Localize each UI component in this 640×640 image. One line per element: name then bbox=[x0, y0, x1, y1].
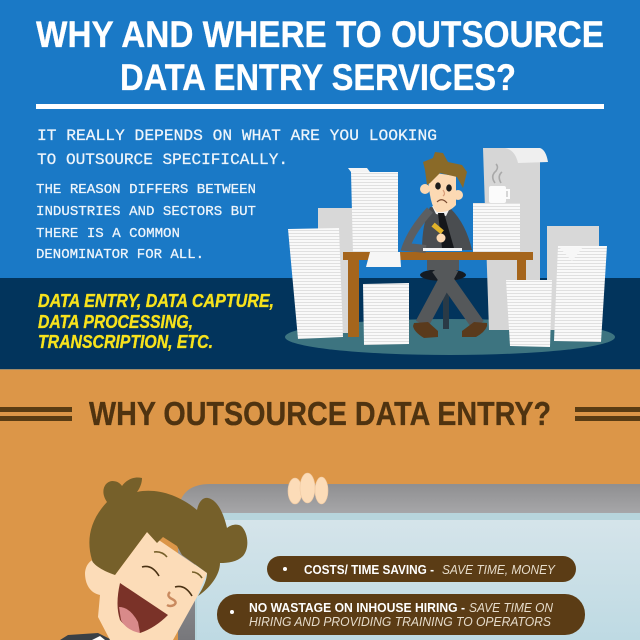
worker head bbox=[420, 152, 467, 212]
paper on desk bbox=[366, 248, 462, 267]
grey back stack left bbox=[318, 208, 355, 333]
title bbox=[36, 14, 604, 98]
callout text: SAVE TIME ON bbox=[469, 601, 554, 615]
tall paper scroll bbox=[483, 148, 548, 330]
text block: intro bbox=[37, 127, 437, 169]
title: DATA ENTRY SERVICES? bbox=[120, 57, 516, 98]
text block: yellow service list: DATA PROCESSING, bbox=[38, 312, 193, 332]
grey back stack right bbox=[547, 226, 599, 330]
paper stack under mug bbox=[473, 203, 520, 252]
desk bbox=[343, 252, 533, 337]
paper stack lower left bbox=[363, 283, 409, 345]
callout: no wastage on inhouse hiring bbox=[217, 594, 585, 635]
mouth bbox=[118, 583, 168, 633]
worker shoes bbox=[413, 322, 487, 338]
coffee mug bbox=[489, 164, 509, 203]
text block: reason: DENOMINATOR FOR ALL. bbox=[36, 247, 204, 263]
callout text: NO WASTAGE ON INHOUSE HIRING - bbox=[249, 601, 465, 615]
suit bbox=[60, 633, 112, 640]
nose bbox=[167, 592, 176, 606]
text block: reason: THE REASON DIFFERS BETWEEN bbox=[36, 182, 256, 198]
worker torso bbox=[406, 206, 472, 250]
callout: costs and time saving bbox=[267, 556, 576, 582]
paper stack right bbox=[554, 246, 607, 342]
callout text: SAVE TIME, MONEY bbox=[442, 563, 557, 577]
bullet bbox=[230, 610, 234, 614]
paper stack lower centre bbox=[506, 280, 552, 347]
text block: reason: INDUSTRIES AND SECTORS BUT bbox=[36, 204, 256, 220]
text block: reason: THERE IS A COMMON bbox=[36, 226, 180, 242]
text block: yellow service list: DATA ENTRY, DATA CAPTURE, bbox=[38, 291, 274, 311]
text block: intro: IT REALLY DEPENDS ON WHAT ARE YOU LOOKING bbox=[37, 127, 437, 145]
panel: orange section background bbox=[0, 369, 640, 640]
decorative heading bars left bbox=[0, 407, 72, 421]
text block: reason bbox=[36, 182, 256, 263]
text block: yellow service list bbox=[38, 291, 274, 352]
callout text bbox=[249, 601, 554, 629]
worker legs bbox=[422, 260, 478, 325]
illustration: laughing man bbox=[60, 477, 247, 640]
floor shadow bbox=[285, 319, 615, 355]
section heading: WHY OUTSOURCE DATA ENTRY? bbox=[89, 395, 551, 432]
icon: hand gripping monitor bbox=[288, 473, 328, 504]
decorative heading bars right bbox=[575, 407, 640, 421]
text block: yellow service list: TRANSCRIPTION, ETC. bbox=[38, 332, 213, 352]
title underline bbox=[36, 104, 604, 109]
tall paper stack left bbox=[348, 168, 398, 254]
worker hand with pencil bbox=[431, 223, 446, 242]
panel: blue header background bbox=[0, 0, 640, 369]
callout text: COSTS/ TIME SAVING - bbox=[304, 563, 434, 577]
chair bbox=[420, 269, 466, 329]
paper stack far left bbox=[288, 228, 343, 339]
face bbox=[85, 532, 207, 640]
text block: intro: TO OUTSOURCE SPECIFICALLY. bbox=[37, 151, 288, 169]
monitor bbox=[178, 484, 640, 640]
laughing eyes and brows bbox=[142, 552, 202, 596]
hair bbox=[89, 477, 247, 596]
bullet bbox=[283, 567, 287, 571]
illustration: worker buried in paper stacks bbox=[285, 148, 615, 355]
callout text: HIRING AND PROVIDING TRAINING TO OPERATORS bbox=[249, 615, 552, 629]
